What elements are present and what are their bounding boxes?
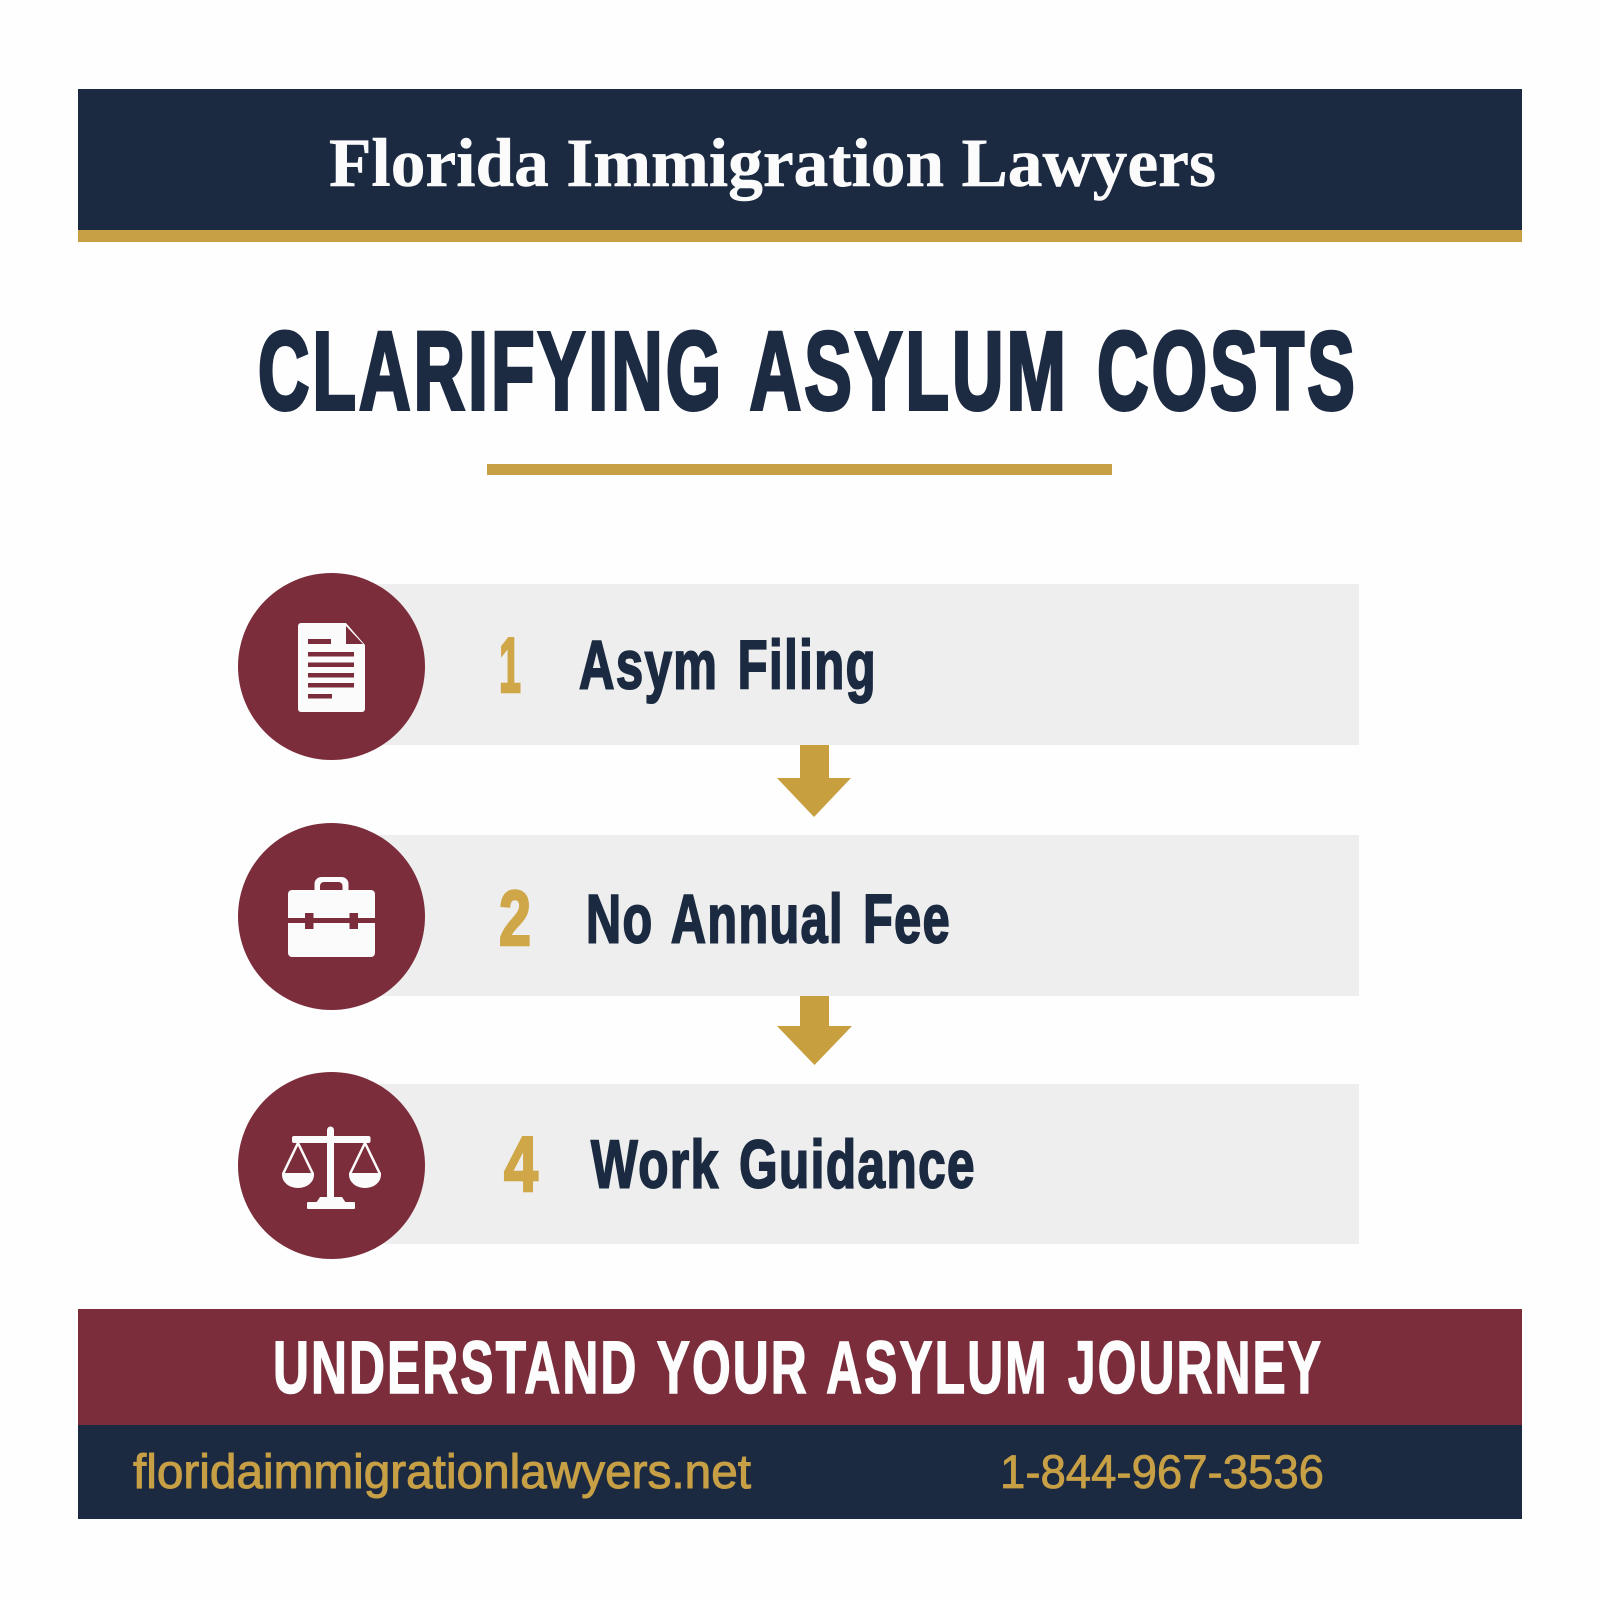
step 3 row [238, 1072, 1359, 1259]
website: floridaimmigrationlawyers.net [133, 1446, 751, 1499]
arrow: step 1 to 2 [777, 745, 851, 817]
title underline [487, 464, 1112, 475]
step number 1: 1 [499, 621, 521, 709]
phone number: 1-844-967-3536 [1000, 1445, 1324, 1498]
step 2 row [238, 823, 1359, 1010]
step label: Work Guidance: Work Guidance [591, 1126, 976, 1202]
icon: briefcase [288, 877, 375, 957]
step number 2: 2 [499, 874, 531, 962]
firm name: Florida Immigration Lawyers [329, 125, 1216, 201]
step label: Asym Filing: Asym Filing [579, 626, 877, 704]
header banner [78, 89, 1522, 242]
step label: No Annual Fee: No Annual Fee [586, 880, 951, 958]
step number 4: 4 [504, 1120, 538, 1208]
arrow: step 2 to 3 [777, 996, 852, 1065]
icon: scales of justice [282, 1126, 381, 1209]
icon: document [298, 623, 365, 712]
step 1 row [238, 573, 1359, 760]
footer contact bar [78, 1425, 1522, 1519]
call-to-action banner [78, 1309, 1522, 1425]
